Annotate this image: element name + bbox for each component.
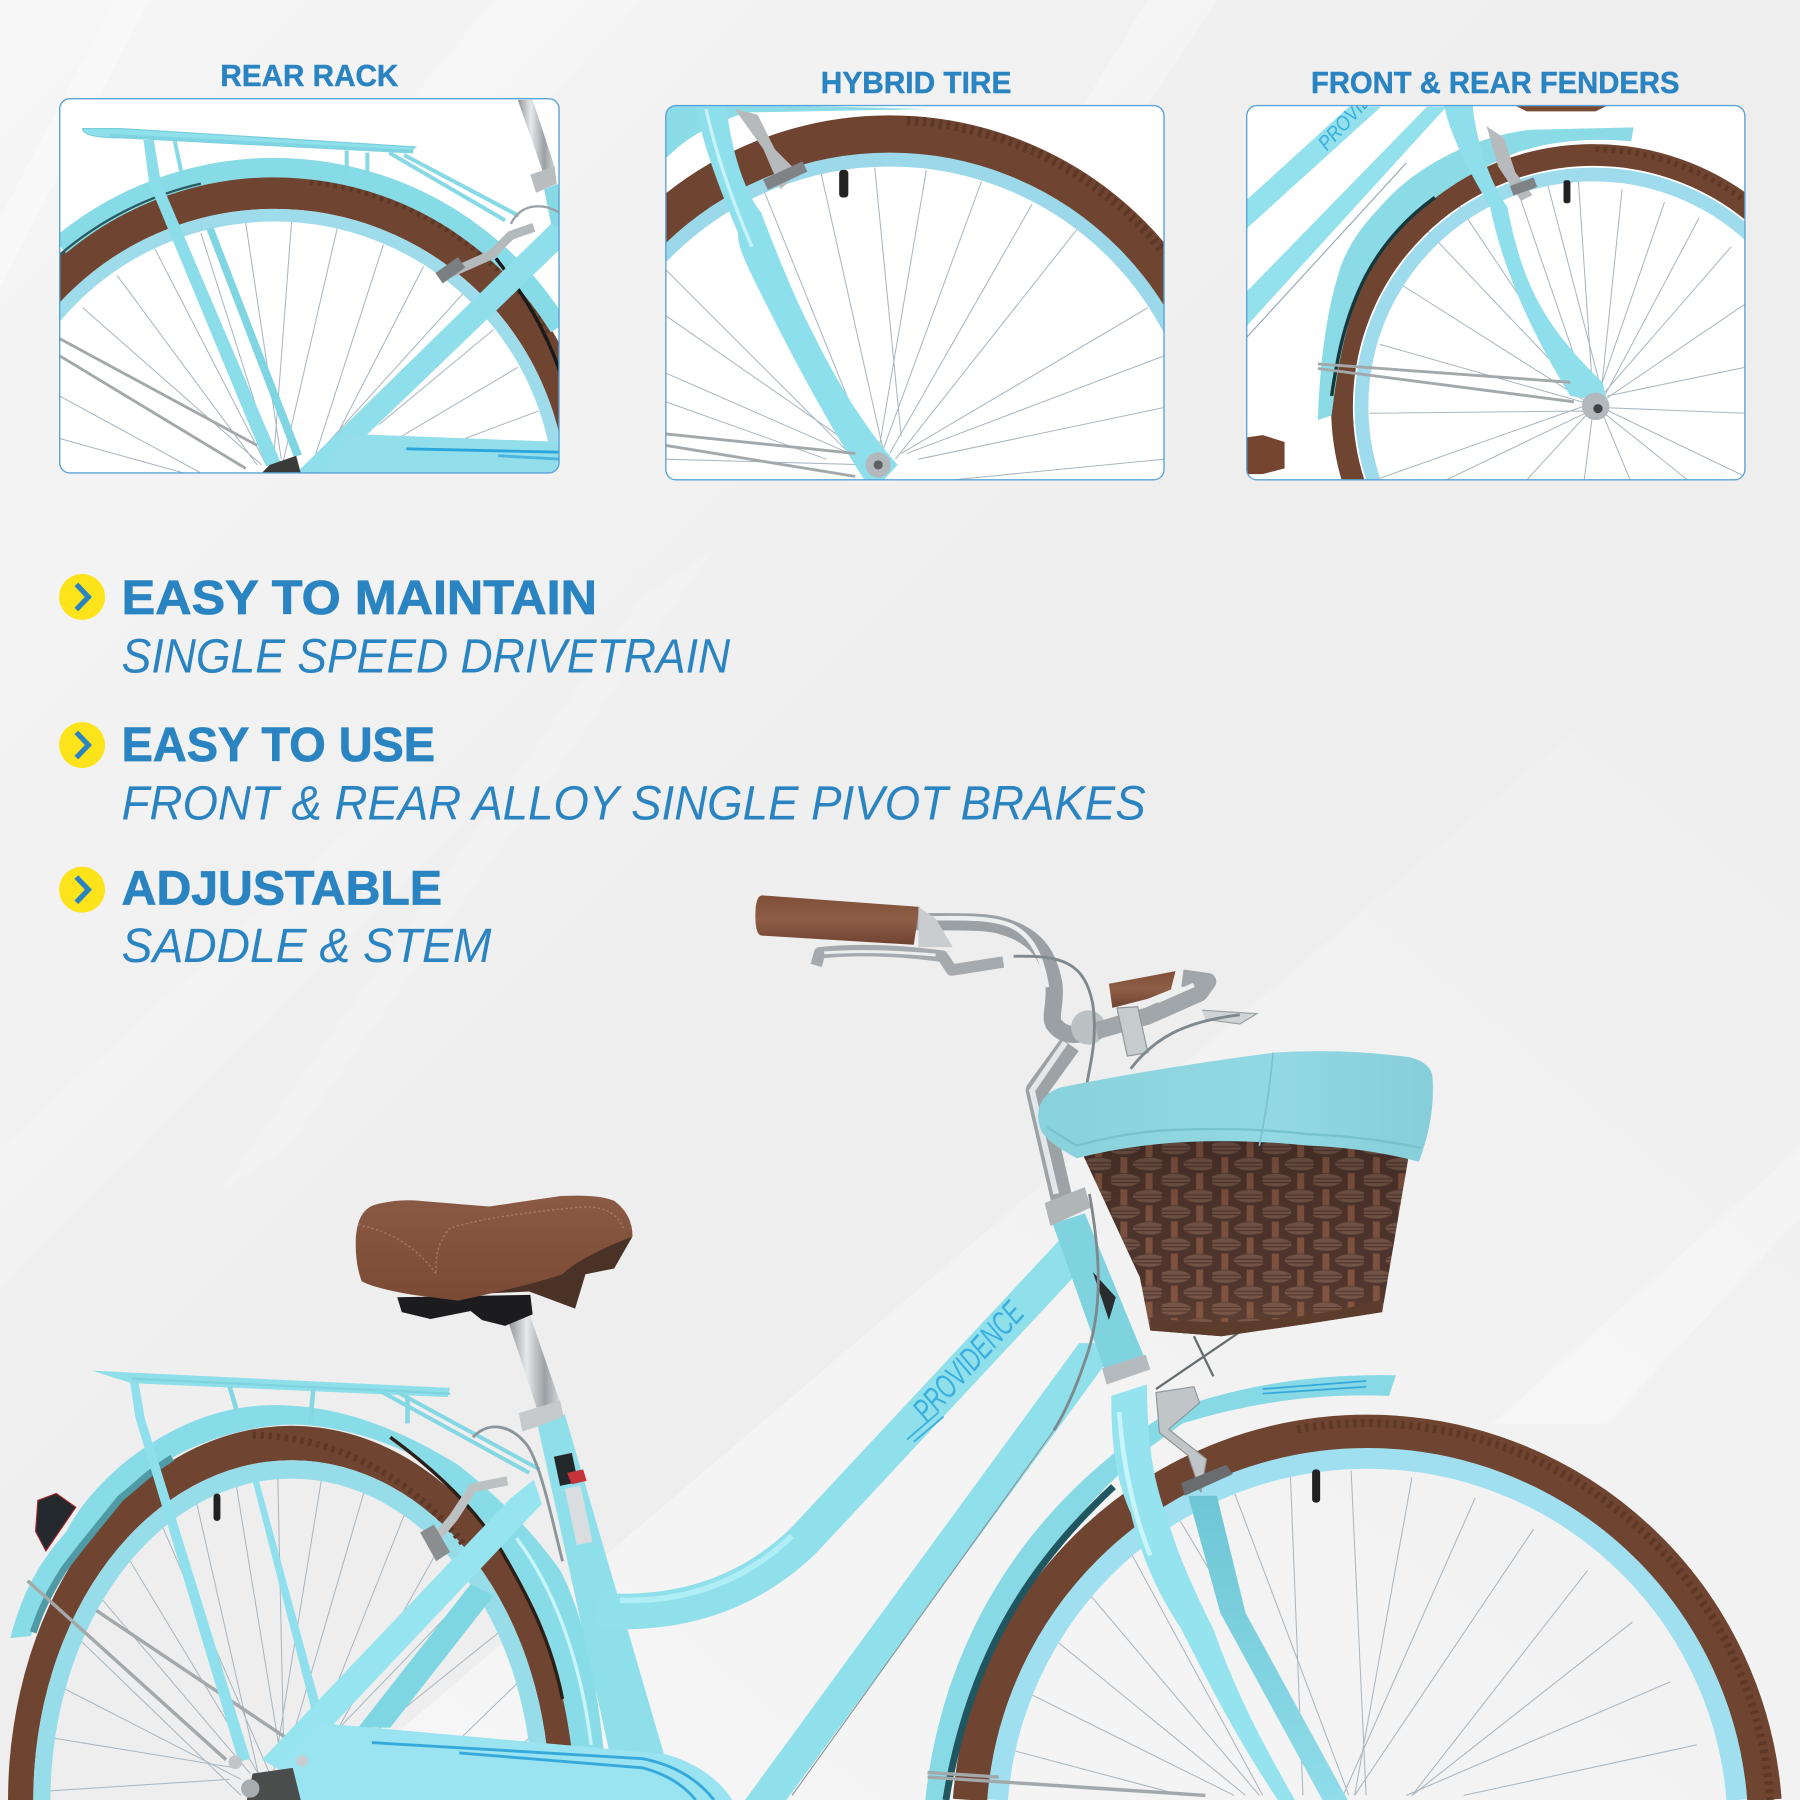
saddle underside [397,1236,633,1326]
icon: yellow chevron bullet [59,574,105,620]
rear fender [10,1405,608,1800]
fender stays [28,1581,285,1760]
right brake lever [1202,1010,1257,1024]
saddle [356,1196,633,1301]
handlebar [918,918,1208,1045]
rear rack photo illustration [60,100,558,472]
down tube [745,1343,1120,1800]
description: FRONT & REAR ALLOY SINGLE PIVOT BRAKES [122,777,1146,831]
rear rack [92,1371,540,1473]
front stays [928,1772,1205,1795]
rear brake [420,1427,562,1561]
feature: easy to use [59,718,1146,831]
front fender photo illustration: PROVIDE [1314,80,1385,155]
description: SADDLE & STEM [122,919,492,973]
feature: easy to maintain [59,571,730,684]
basket cover [1038,1051,1433,1162]
front wheel [970,1423,1770,1800]
icon: yellow chevron bullet [59,867,105,913]
right grip [1109,971,1176,1008]
feature: adjustable [59,862,492,973]
down tube cable [792,1430,1054,1795]
panel borders [60,99,1745,480]
heading: hybrid tire: HYBRID TIRE [821,65,1011,100]
hybrid tire photo illustration [666,106,1164,480]
heading: EASY TO USE [122,718,435,772]
head tube [1053,1213,1150,1384]
brand lettering [906,1294,1032,1442]
description: SINGLE SPEED DRIVETRAIN [122,630,730,684]
bicycle illustration [8,895,1770,1800]
chain stay [358,1584,494,1728]
panel: hybrid tire [666,72,1164,480]
seat stay [262,1480,542,1774]
heading: EASY TO MAINTAIN [122,571,597,625]
heading: front and rear fenders: FRONT & REAR FENDERS [1311,65,1679,100]
seat tube [537,1414,677,1800]
panel frame [60,99,559,473]
rear wheel [8,1426,575,1800]
brake cables [1014,956,1240,1430]
rear hub [228,1755,301,1800]
left grip [755,895,920,945]
rack struts [130,1378,321,1762]
step-through top tube [597,1251,1073,1612]
fork rear blade [1188,1496,1348,1800]
brand lettering: PROVIDENCE [906,1294,1032,1429]
stem [1032,1042,1091,1226]
heading: rear rack: REAR RACK [220,58,399,93]
icon: yellow chevron bullet [59,722,105,768]
wicker basket [1074,1136,1412,1336]
front fender photo illustration [1247,106,1744,480]
panel frame [1247,106,1745,480]
reflector [1117,1007,1148,1056]
front brake [1156,1333,1239,1496]
tail light [36,1493,76,1551]
feature list [59,571,1146,973]
heading: ADJUSTABLE [122,862,442,916]
seat post [509,1317,564,1432]
chain guard [249,1723,732,1800]
panel: front and rear fenders [1247,72,1744,480]
front fender [925,1375,1396,1800]
left brake lever [816,907,1003,970]
panel: rear rack [60,64,558,472]
panel frame [666,106,1164,480]
fork front blade [1111,1384,1295,1800]
